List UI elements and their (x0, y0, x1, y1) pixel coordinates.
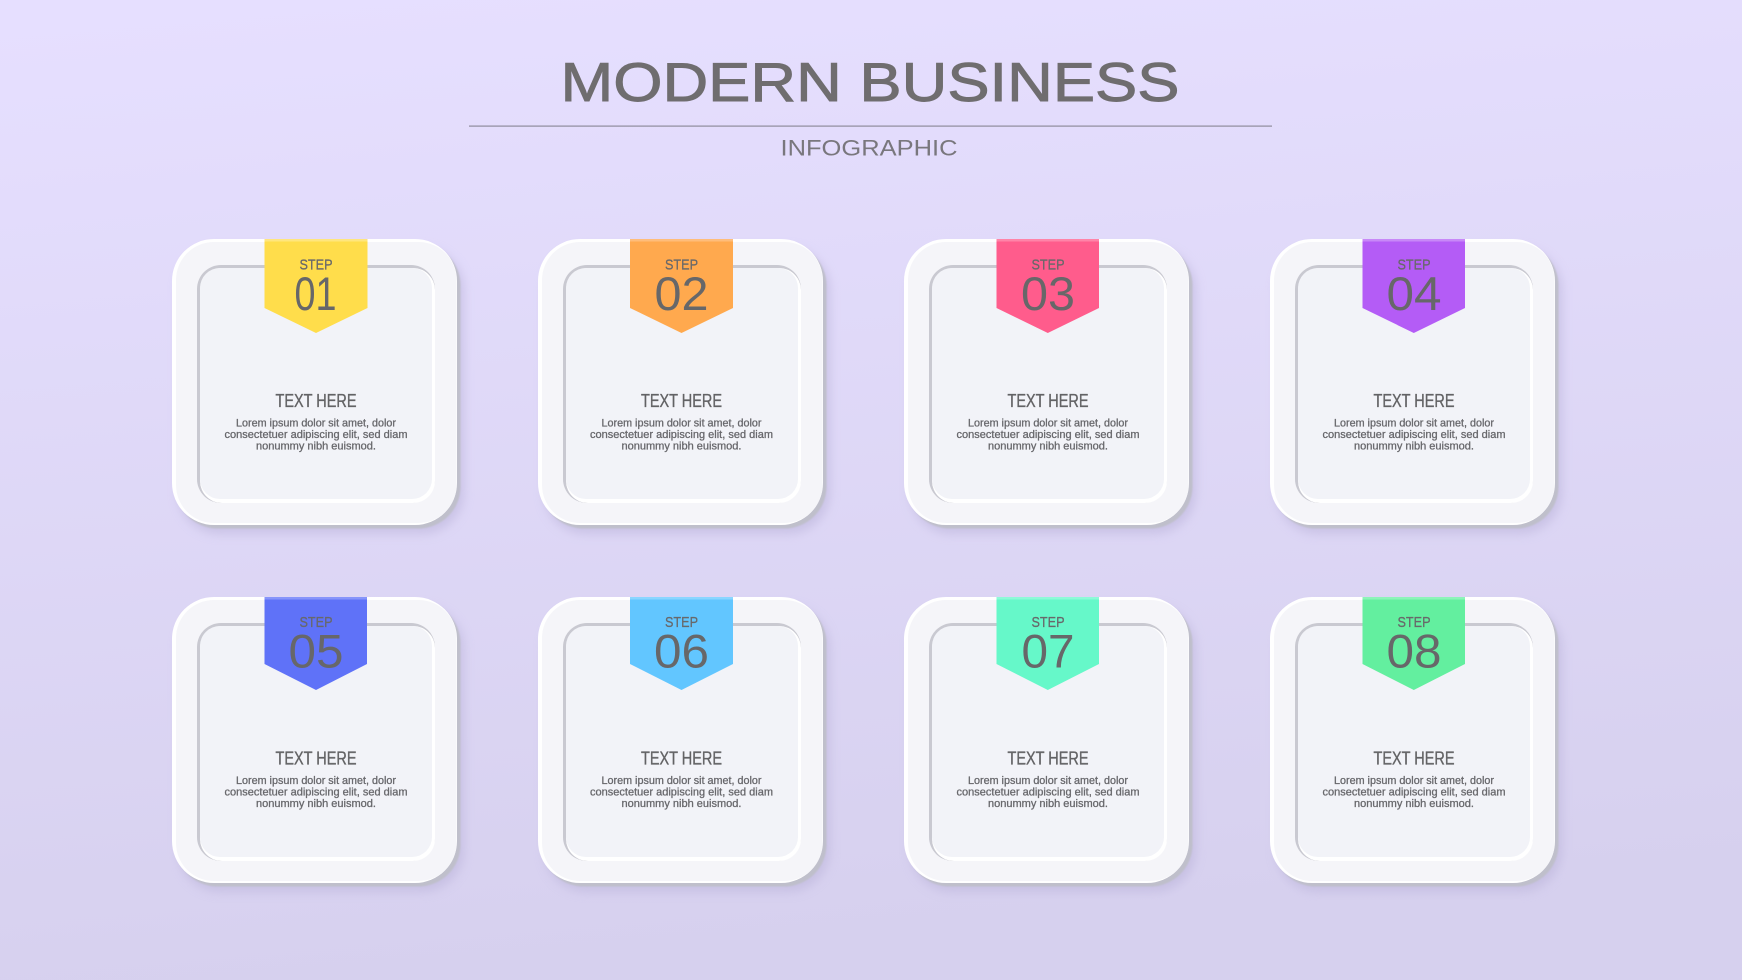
text block: step 04: nonummy nibh euismod. (1354, 440, 1474, 452)
heading: step 07: TEXT HERE (1008, 748, 1088, 768)
heading: step 03: TEXT HERE (1008, 391, 1088, 411)
text block: step 07: nonummy nibh euismod. (988, 798, 1108, 810)
text block: step 07: Lorem ipsum dolor sit amet, dolor (968, 775, 1128, 787)
step number 02: 02 (654, 267, 708, 320)
panel: step 02 (538, 239, 830, 534)
step number 03: STEP (1032, 258, 1064, 274)
step number 06: 06 (654, 624, 709, 678)
ribbon: step 08 (1362, 597, 1465, 690)
heading: step 02: TEXT HERE (641, 391, 722, 411)
step number 01: STEP (300, 258, 332, 274)
step number 06: STEP (665, 615, 698, 631)
text block: step 06: nonummy nibh euismod. (622, 798, 742, 810)
text block: step 03: Lorem ipsum dolor sit amet, dolor (968, 418, 1128, 430)
text block: step 02: nonummy nibh euismod. (622, 440, 742, 452)
step number 03: 03 (1021, 267, 1075, 320)
ribbon: step 02 (630, 239, 733, 333)
ribbon: step 04 (1362, 239, 1465, 333)
text block: step 05 (224, 775, 408, 810)
text block: step 02 (590, 418, 773, 452)
step number 07: 07 (1022, 624, 1074, 678)
step number 04: 04 (1386, 267, 1442, 320)
text block: step 01: Lorem ipsum dolor sit amet, dolor (236, 418, 396, 430)
text block: step 07 (956, 775, 1140, 810)
text block: step 02: consectetuer adipiscing elit, sed diam (590, 429, 773, 441)
step number 08: STEP (1398, 615, 1430, 631)
panel: step 04 (1270, 239, 1562, 534)
subtitle: INFOGRAPHIC (780, 136, 958, 160)
text block: step 03: nonummy nibh euismod. (988, 440, 1108, 452)
panel: step 06 (538, 597, 830, 892)
step number 05: STEP (300, 615, 332, 631)
heading: step 01: TEXT HERE (276, 391, 356, 411)
text block: step 01: consectetuer adipiscing elit, sed diam (224, 429, 408, 441)
text block: step 04: Lorem ipsum dolor sit amet, dolor (1334, 418, 1494, 430)
text block: step 08: Lorem ipsum dolor sit amet, dolor (1334, 775, 1494, 787)
text block: step 04: consectetuer adipiscing elit, sed diam (1322, 429, 1506, 441)
ribbon: step 07 (996, 597, 1099, 690)
step number 05: 05 (288, 624, 344, 678)
text block: step 05: Lorem ipsum dolor sit amet, dolor (236, 775, 396, 787)
ribbon: step 03 (996, 239, 1099, 333)
text block: step 08 (1322, 775, 1506, 810)
panel: step 05 (172, 597, 464, 892)
panel: step 01 (172, 239, 464, 534)
panel: step 08 (1270, 597, 1562, 892)
text block: step 07: consectetuer adipiscing elit, sed diam (956, 786, 1140, 798)
text block: step 03: consectetuer adipiscing elit, sed diam (956, 429, 1140, 441)
heading: step 04: TEXT HERE (1374, 391, 1454, 411)
heading: step 05: TEXT HERE (276, 748, 356, 768)
panel: step 07 (904, 597, 1196, 892)
step number 08: 08 (1386, 624, 1442, 678)
step number 02: STEP (665, 258, 698, 274)
ribbon: step 05 (264, 597, 367, 690)
ribbon: step 06 (630, 597, 733, 690)
text block: step 03 (956, 418, 1140, 452)
heading: step 08: TEXT HERE (1374, 748, 1454, 768)
text block: step 02: Lorem ipsum dolor sit amet, dolor (602, 418, 762, 430)
text block: step 05: nonummy nibh euismod. (256, 798, 376, 810)
text block: step 06: Lorem ipsum dolor sit amet, dolor (602, 775, 762, 787)
text block: step 08: nonummy nibh euismod. (1354, 798, 1474, 810)
text block: step 05: consectetuer adipiscing elit, sed diam (224, 786, 408, 798)
text block: step 06: consectetuer adipiscing elit, sed diam (590, 786, 773, 798)
step number 01: 01 (294, 267, 336, 320)
panel: step 03 (904, 239, 1196, 534)
ribbon: step 01 (264, 239, 368, 333)
text block: step 04 (1322, 418, 1506, 452)
title: MODERN BUSINESS (560, 51, 1180, 113)
text block: step 01: nonummy nibh euismod. (256, 440, 376, 452)
text block: step 06 (590, 775, 773, 810)
step number 04: STEP (1398, 258, 1430, 274)
heading: step 06: TEXT HERE (641, 748, 722, 768)
step number 07: STEP (1032, 615, 1064, 631)
text block: step 08: consectetuer adipiscing elit, sed diam (1322, 786, 1506, 798)
text block: step 01 (224, 418, 408, 452)
